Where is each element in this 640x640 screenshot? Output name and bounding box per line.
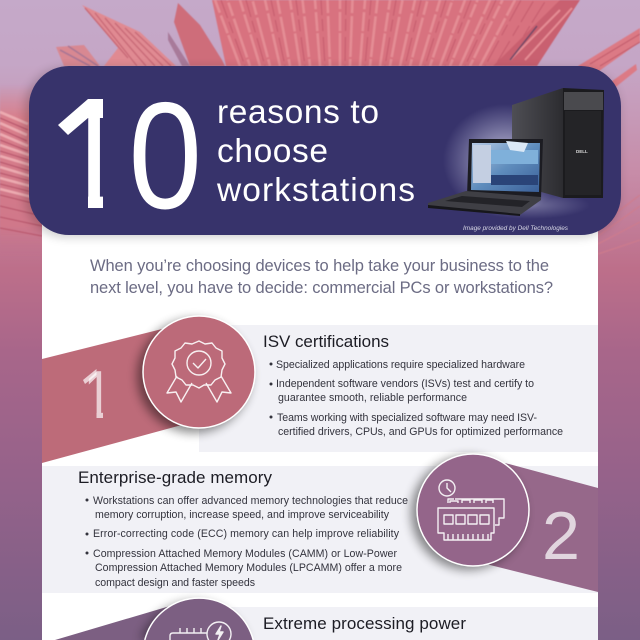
- bullets 2: Workstations can offer advanced memory technologies that reduce: [93, 495, 408, 507]
- icon: processor with lightning bolt: [170, 622, 231, 640]
- numeral 1: 1: [84, 357, 112, 433]
- section 2: Enterprise-grade memory: [42, 454, 598, 593]
- ribbon 2: [470, 463, 598, 592]
- intro text: [90, 257, 553, 297]
- circle badge 3: [140, 598, 253, 640]
- big number 10: 10: [55, 71, 202, 241]
- bullets 2: Compression Attached Memory Modules (LPCAMM) offer a more: [95, 562, 402, 574]
- bullets 1: Teams working with specialized software may need ISV-: [277, 412, 537, 424]
- header banner: [25, 66, 621, 241]
- image credit: Image provided by Dell Technologies: [463, 225, 569, 232]
- title text: [216, 94, 415, 209]
- bullets 2: Error-correcting code (ECC) memory can help improve reliability: [93, 528, 400, 540]
- heading 1: ISV certifications: [263, 332, 389, 351]
- bullets 2: compact design and faster speeds: [95, 577, 255, 589]
- product image: workstation tower and laptop: [428, 88, 604, 219]
- bullets 1: Specialized applications require specialized hardware: [276, 359, 525, 371]
- bullets 1: [270, 359, 563, 438]
- background: pink burst rays: [0, 0, 640, 260]
- bullets 2: [86, 495, 408, 589]
- white content panel: [42, 200, 598, 640]
- numeral 2: 2: [542, 498, 580, 574]
- ribbon 1: [42, 327, 200, 463]
- icon: award rosette: [167, 341, 231, 402]
- bullets 2: memory corruption, increase speed, and improve serviceability: [95, 509, 390, 521]
- ribbon 3: [55, 606, 200, 640]
- bullets 1: Independent software vendors (ISVs) test and certify to: [276, 378, 534, 390]
- section 3: Extreme processing power: [55, 598, 598, 640]
- title text: reasons to: [217, 94, 379, 131]
- product image: workstation tower and laptop: DELL: [576, 149, 588, 154]
- section 1: ISV certifications: [42, 316, 598, 463]
- intro text: When you’re choosing devices to help take your business to the: [90, 257, 549, 275]
- title text: choose: [217, 133, 328, 170]
- bullets 1: certified drivers, CPUs, and GPUs for optimized performance: [278, 426, 563, 438]
- heading 2: Enterprise-grade memory: [78, 468, 272, 487]
- icon: memory modules: [438, 480, 504, 540]
- bullets 2: Compression Attached Memory Modules (CAMM) or Low-Power: [93, 548, 397, 560]
- circle badge 2: [411, 454, 529, 570]
- title text: workstations: [216, 172, 415, 209]
- intro text: next level, you have to decide: commercial PCs or workstations?: [90, 279, 553, 297]
- bullets 1: guarantee smooth, reliable performance: [278, 392, 467, 404]
- heading 3: Extreme processing power: [263, 614, 466, 633]
- circle badge 1: [137, 316, 255, 433]
